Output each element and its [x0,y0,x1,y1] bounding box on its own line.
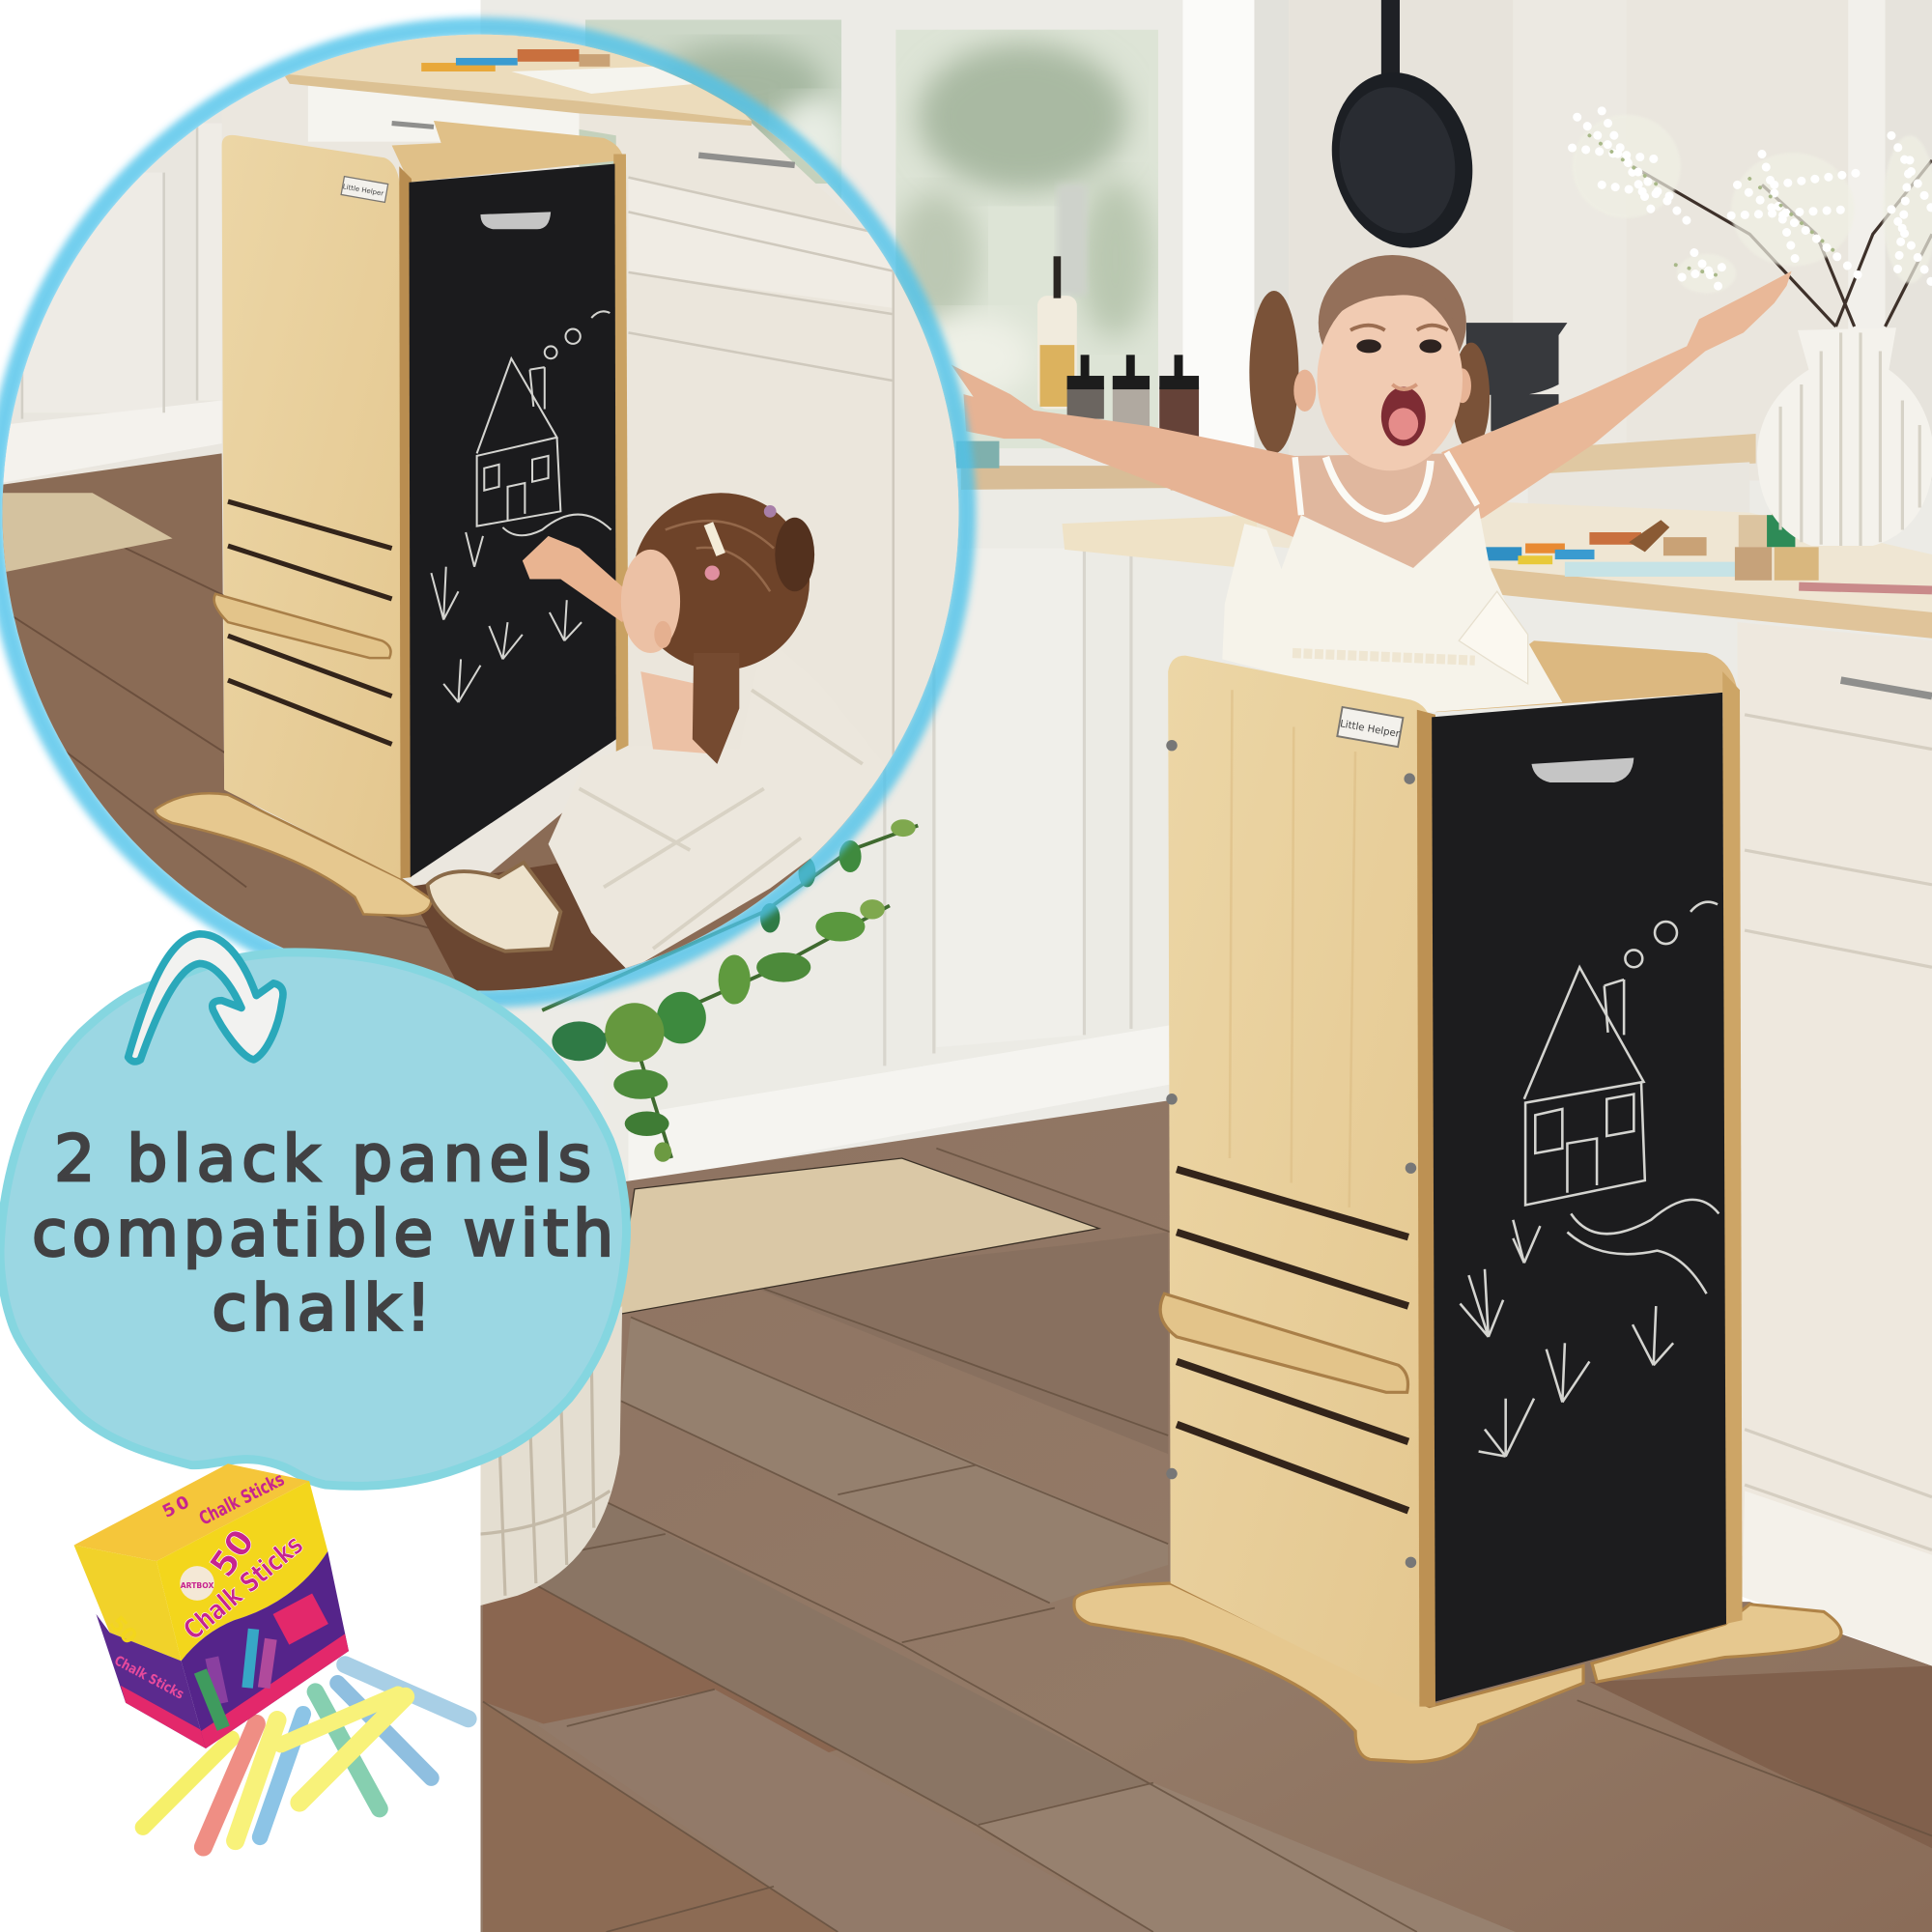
chalk box [74,1463,349,1748]
blue callout bubble [0,952,627,1486]
callout text [32,1121,613,1345]
arms [952,365,1306,542]
chalk box: ARTBOX [181,1581,213,1590]
girl on tower [952,255,1792,712]
box top [74,1463,309,1561]
skirt [549,635,887,971]
callout text: compatible with [32,1196,613,1271]
chalk box: Chalk Sticks [111,1653,186,1703]
box labels: 50 [203,1522,263,1584]
toys on counter [1486,514,1932,595]
dress [1222,452,1562,712]
chalk box: Chalk Sticks [178,1528,309,1646]
window left [585,19,841,199]
inset cabinets [308,84,961,788]
vase with flowers [1573,111,1932,546]
chalk box: 50 [104,1611,142,1650]
hair [1249,255,1490,453]
box front [156,1481,327,1661]
tower side panel [1160,656,1432,1707]
face [1293,281,1477,568]
soap bottle and jars [956,256,1199,469]
back and arm [640,671,715,754]
inset tower side: Little Helper [342,182,384,198]
label: Little Helper [1339,719,1401,740]
inset counter [283,25,752,126]
label [1337,707,1403,747]
inset girl [428,493,887,971]
inset tower back [392,121,623,183]
inset chalkboard [409,164,616,877]
circular inset photo [0,17,974,1005]
inset floor [0,453,961,1005]
icon: curved arrow [128,934,283,1062]
floor [480,1100,1932,1932]
hair [632,493,810,670]
shoes and legs [428,863,560,952]
chalkboard panel [1432,693,1726,1701]
handle [1531,757,1634,782]
inset glow ring [0,27,966,998]
back counter [961,466,1174,491]
tower base [1074,1583,1583,1762]
chalk sticks [143,1664,469,1847]
plant pot [480,1306,622,1605]
chalk drawing [1460,902,1719,1457]
kitchen island counter [1062,501,1932,639]
inset left wall [0,74,222,469]
cooking pot [1466,323,1567,431]
chalk box: Chalk Sticks [195,1468,288,1530]
plant leaves [542,819,918,1162]
chalk box: 50 [159,1492,192,1522]
wall [480,0,1932,1182]
tower back panel [1435,640,1737,712]
inset tower base [156,793,431,916]
right cabinets [1737,622,1932,1665]
callout text: chalk! [212,1269,431,1345]
floor planks [483,1149,1932,1932]
callout text: 2 black panels [54,1121,591,1196]
slots [1177,1169,1408,1511]
wood edge [1417,710,1435,1707]
rug [616,1158,1099,1315]
inset window [579,17,844,184]
kitchen photo scene [480,0,1932,1932]
inset tower side [214,135,401,878]
lower cabinets [604,488,1171,1185]
window right [894,30,1158,448]
frying pan [1331,0,1472,248]
step [1160,1293,1408,1392]
box left side [74,1545,182,1661]
inset rug [0,493,173,573]
